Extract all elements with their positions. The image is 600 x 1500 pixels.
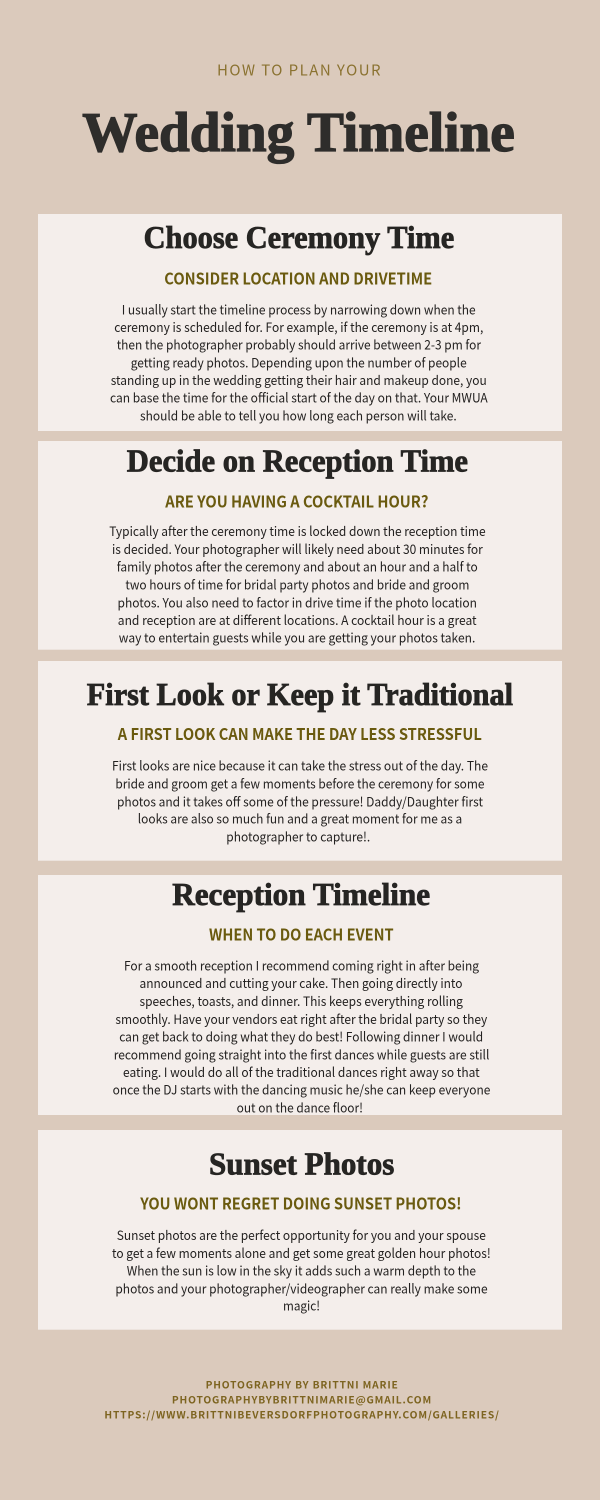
heading: sunset photos: Sunset Photos	[209, 1145, 394, 1181]
heading: decide on reception time: Decide on Reception Time	[127, 443, 468, 479]
footer: contact details: PHOTOGRAPHYBYBRITTNIMARIE@GMAIL.COM	[172, 1391, 431, 1406]
text block: first look body: First looks are nice because it can take the stress out of the day. The	[112, 755, 488, 774]
text block: first look body: bride and groom get a few moments before the ceremony for some	[115, 773, 485, 792]
kicker: how to plan your: HOW TO PLAN YOUR	[217, 59, 381, 80]
text block: sunset photos body	[112, 1225, 491, 1314]
text block: reception timeline body: can get back to doing what they do best! Following dinner I would	[119, 1026, 483, 1045]
panel: decide on reception time	[38, 441, 562, 650]
text block: ceremony time body: ceremony is scheduled for. For example, if the ceremony is at 4pm,	[114, 317, 483, 336]
panel: reception timeline	[38, 875, 562, 1116]
text block: ceremony time body: then the photographer probably should arrive between 2-3 pm for	[117, 335, 482, 354]
text block: first look body: photographer to capture!.	[226, 827, 370, 846]
subheading: you wont regret doing sunset photos: YOU WONT REGRET DOING SUNSET PHOTOS!	[139, 1191, 462, 1214]
text block: reception timeline body: smoothly. Have your vendors eat right after the bridal party so they	[115, 1009, 488, 1028]
text block: first look body	[112, 755, 488, 846]
subheading: when to do each event: WHEN TO DO EACH EVENT	[209, 923, 394, 946]
text block: reception timeline body	[113, 956, 490, 1116]
subheading: consider location and drivetime: CONSIDER LOCATION AND DRIVETIME	[164, 266, 432, 289]
text block: sunset photos body: photos and your photographer/videographer can really make some	[115, 1278, 488, 1297]
text block: reception time body: family photos after the ceremony and about an hour and a half to	[117, 557, 478, 576]
text block: reception timeline body: out on the dance floor!	[237, 1097, 363, 1116]
text block: sunset photos body: to get a few moments alone and get some great golden hour photos!	[112, 1243, 491, 1262]
text block: reception time body	[109, 521, 486, 647]
text block: ceremony time body	[110, 299, 488, 424]
text block: reception timeline body: once the DJ starts with the dancing music he/she can keep everyone	[113, 1080, 490, 1099]
heading: first look or keep it traditional: First Look or Keep it Traditional	[87, 676, 513, 712]
text block: reception time body: two hours of time for bridal party photos and bride and groom	[125, 575, 469, 594]
text block: sunset photos body: When the sun is low in the sky it adds such a warm depth to the	[127, 1260, 476, 1279]
title: wedding timeline: Wedding Timeline	[82, 102, 515, 164]
text block: reception timeline body: eating. I would do all of the traditional dances right away so that	[123, 1062, 480, 1081]
panel: first look or keep it traditional	[38, 661, 562, 861]
text block: first look body: looks are also so much fun and a great moment for me as a	[138, 809, 462, 828]
text block: sunset photos body: magic!	[283, 1295, 320, 1314]
footer: contact details: HTTPS://WWW.BRITTNIBEVERSDORFPHOTOGRAPHY.COM/GALLERIES/	[104, 1406, 499, 1421]
subheading: a first look can make the day less stressful: A FIRST LOOK CAN MAKE THE DAY LESS STRESSFUL	[117, 722, 482, 745]
panel: choose ceremony time	[38, 214, 562, 431]
text block: ceremony time body: can base the time for the official start of the day on that. Your MWUA	[110, 388, 488, 407]
text block: reception time body: photos. You also need to factor in drive time if the photo location	[118, 592, 477, 611]
text block: sunset photos body: Sunset photos are the perfect opportunity for you and your spouse	[117, 1225, 486, 1244]
panel: sunset photos	[38, 1130, 562, 1330]
text block: ceremony time body: getting ready photos. Depending upon the number of people	[131, 353, 467, 372]
text block: reception timeline body: announced and cutting your cake. Then going directly into	[140, 973, 463, 992]
text block: ceremony time body: standing up in the wedding getting their hair and makeup done, you	[111, 370, 487, 389]
text block: reception time body: is decided. Your photographer will likely need about 30 minutes for	[112, 539, 484, 558]
text block: reception timeline body: recommend going straight into the first dances while guests are still	[114, 1044, 490, 1063]
text block: reception time body: and reception are at different locations. A cocktail hour is a great	[118, 610, 477, 629]
text block: reception timeline body: For a smooth reception I recommend coming right in after being	[124, 956, 480, 975]
footer: contact details	[104, 1376, 499, 1421]
text block: reception timeline body: speeches, toasts, and dinner. This keeps everything rolling	[140, 991, 464, 1010]
heading: reception timeline: Reception Timeline	[172, 876, 430, 912]
text block: reception time body: Typically after the ceremony time is locked down the reception time	[109, 521, 486, 540]
text block: first look body: photos and it takes off some of the pressure! Daddy/Daughter first	[117, 791, 483, 810]
text block: ceremony time body: I usually start the timeline process by narrowing down when the	[122, 299, 476, 318]
footer: contact details: PHOTOGRAPHY BY BRITTNI MARIE	[206, 1376, 398, 1391]
text block: ceremony time body: should be able to tell you how long each person will take.	[140, 405, 457, 424]
text block: reception time body: way to entertain guests while you are getting your photos taken.	[119, 628, 475, 647]
heading: choose ceremony time: Choose Ceremony Time	[144, 219, 454, 255]
subheading: are you having a cocktail hour: ARE YOU HAVING A COCKTAIL HOUR?	[164, 489, 428, 512]
